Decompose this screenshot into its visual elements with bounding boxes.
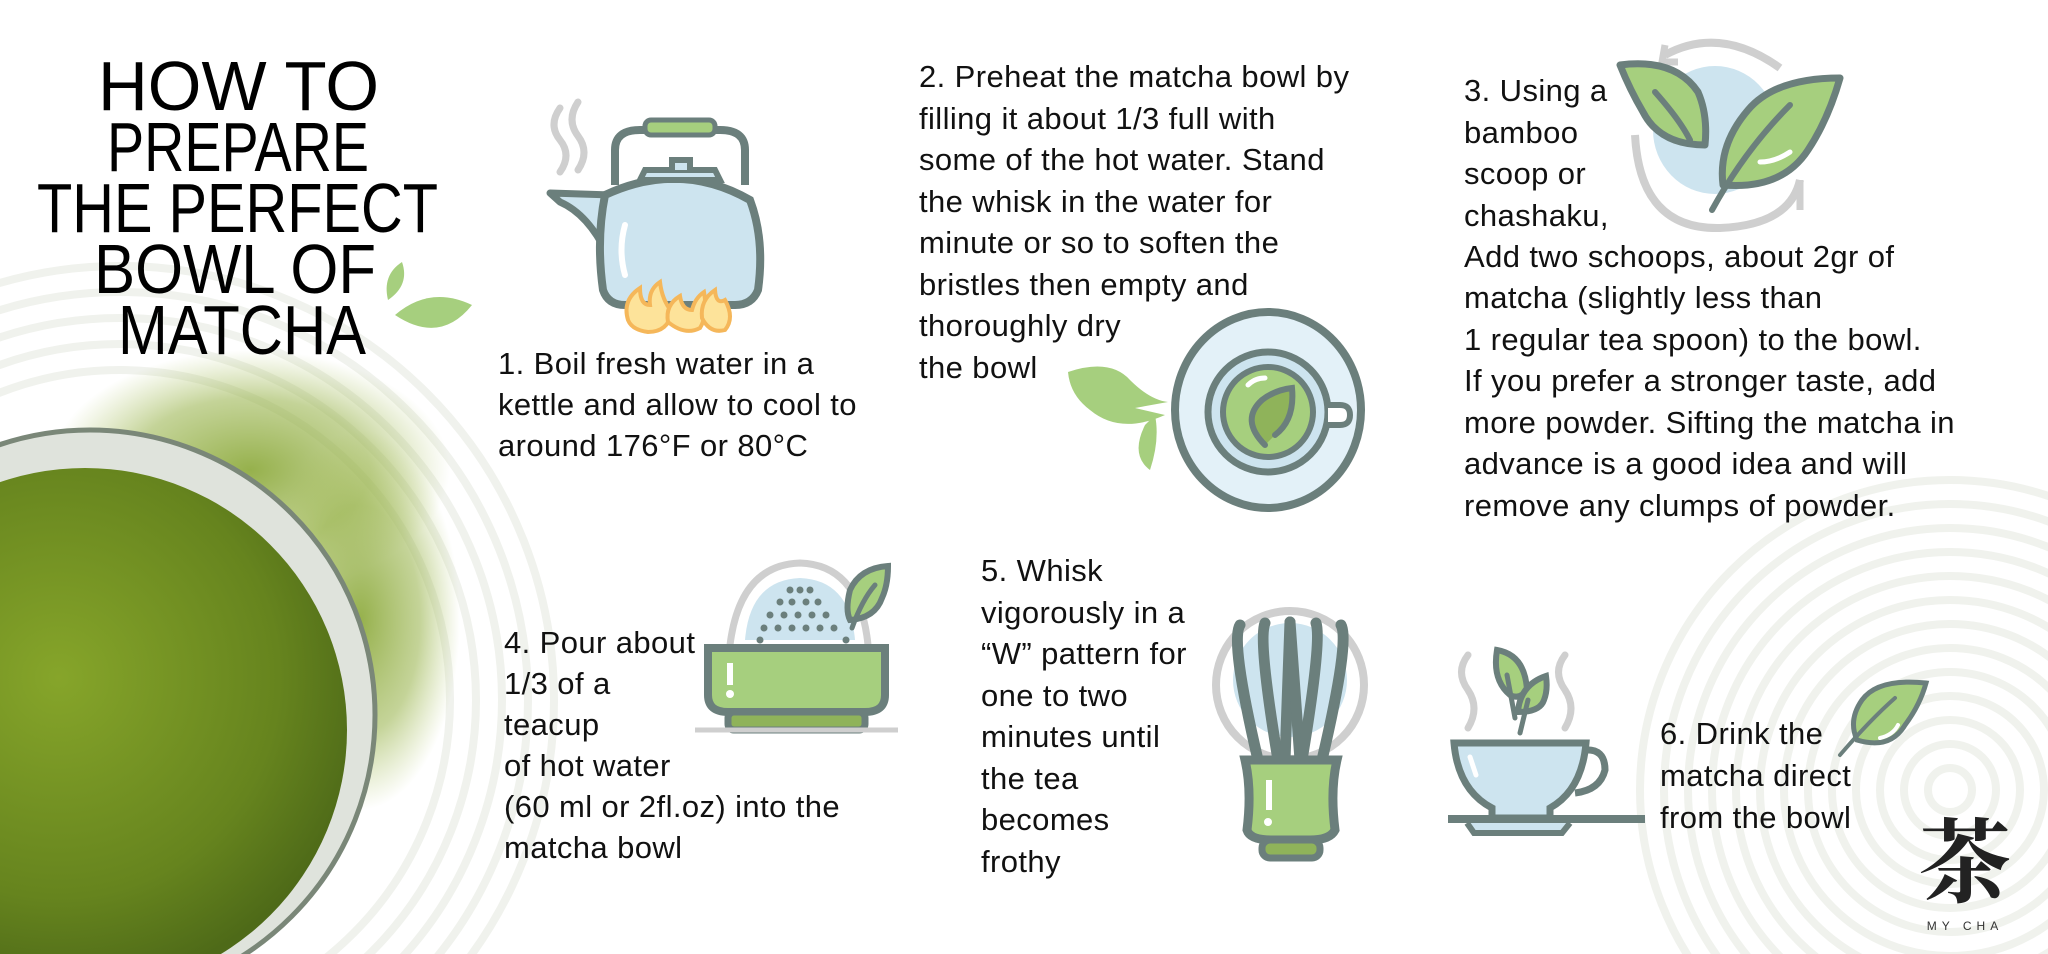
logo: MY CHA: MY CHA (1927, 919, 2003, 933)
text: step 5: vigorously in a (981, 595, 1186, 630)
text: step 1: around 176°F or 80°C (498, 428, 808, 463)
icon: bowl top view with leaves (1068, 312, 1361, 508)
text: step 2: minute or so to soften the (919, 225, 1279, 260)
text: step 2: some of the hot water. Stand (919, 142, 1325, 177)
text: step 4: 4. Pour about (504, 625, 695, 660)
icon: whisk (1216, 611, 1364, 858)
text: step 2: 2. Preheat the matcha bowl by (919, 59, 1349, 94)
text: step 5: minutes until (981, 719, 1160, 754)
text: step 3: more powder. Sifting the matcha in (1464, 405, 1955, 440)
photo: matcha bowl (0, 430, 375, 954)
text: step 5: one to two (981, 678, 1128, 713)
text: step 3: chashaku, (1464, 198, 1609, 233)
text: step 3: bamboo (1464, 115, 1578, 150)
title: MATCHA (118, 291, 366, 369)
text: step 3: scoop or (1464, 156, 1586, 191)
text: step 1: kettle and allow to cool to (498, 387, 857, 422)
text: step 5: frothy (981, 844, 1061, 879)
text: step 4: teacup (504, 707, 599, 742)
text: step 3: If you prefer a stronger taste, add (1464, 363, 1936, 398)
text: step 2: the whisk in the water for (919, 184, 1272, 219)
text: step 5: becomes (981, 802, 1110, 837)
background spiral right (1640, 480, 2048, 954)
text: step 6: matcha direct (1660, 758, 1851, 793)
text: step 5: 5. Whisk (981, 553, 1103, 588)
text: step 3: 1 regular tea spoon) to the bowl. (1464, 322, 1922, 357)
text: step 3: advance is a good idea and will (1464, 446, 1907, 481)
text: step 6: 6. Drink the (1660, 716, 1823, 751)
icon: bowl with sifter (695, 563, 898, 730)
title: THE PERFECT (37, 169, 438, 247)
text: step 5: “W” pattern for (981, 636, 1187, 671)
title: BOWL OF (94, 230, 376, 308)
text: step 6: from the bowl (1660, 800, 1851, 835)
text: step 4: 1/3 of a (504, 666, 611, 701)
text: step 3: 3. Using a (1464, 73, 1608, 108)
text: step 3: Add two schoops, about 2gr of (1464, 239, 1894, 274)
text: step 2: filling it about 1/3 full with (919, 101, 1276, 136)
text: step 2: bristles then empty and (919, 267, 1249, 302)
text: step 3: matcha (slightly less than (1464, 280, 1822, 315)
icon: tea leaves cycle (1620, 43, 1840, 228)
icon: kettle (550, 102, 760, 332)
title: HOW TO (98, 47, 379, 125)
text: step 1: 1. Boil fresh water in a (498, 346, 815, 381)
logo: MY CHA: 茶 (1919, 790, 2011, 922)
text: step 2: thoroughly dry (919, 308, 1121, 343)
title (37, 47, 438, 369)
background rings left (0, 266, 554, 954)
text: step 4: (60 ml or 2fl.oz) into the (504, 789, 840, 824)
icon: leaf step 6 (1840, 682, 1926, 755)
text: step 4: of hot water (504, 748, 671, 783)
icon: title leaves (387, 262, 472, 328)
text: step 4: matcha bowl (504, 830, 682, 865)
title: PREPARE (107, 108, 369, 186)
text: step 3: remove any clumps of powder. (1464, 488, 1896, 523)
icon: teacup with leaves (1448, 650, 1645, 833)
text: step 2: the bowl (919, 350, 1038, 385)
text: step 5: the tea (981, 761, 1079, 796)
matcha powder scatter (50, 350, 460, 810)
